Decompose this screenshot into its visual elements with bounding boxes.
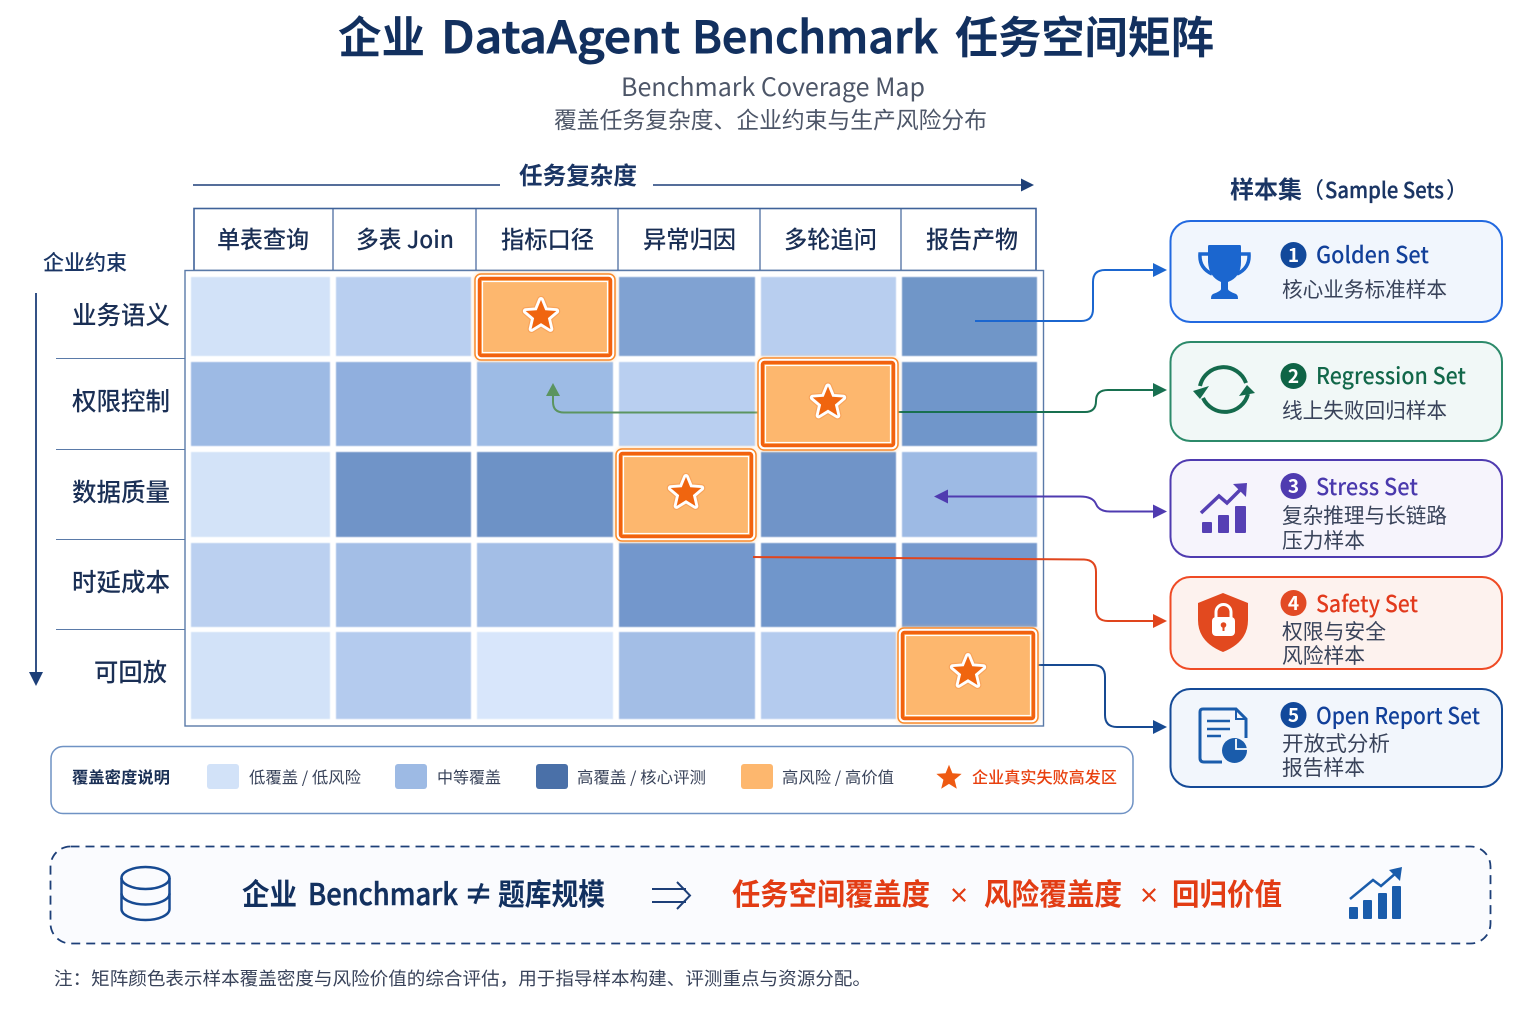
icon: implies arrow <box>652 882 690 909</box>
card title: Golden Set <box>1316 236 1429 270</box>
legend: high coverage: 高覆盖 / 核心评测 <box>577 764 706 788</box>
axis: task complexity: 任务复杂度 <box>519 156 637 191</box>
column headers: 指标口径 <box>501 220 594 255</box>
formula right: × <box>948 880 970 910</box>
heading: sample sets: 样本集 <box>1230 170 1302 205</box>
row 1 cells <box>191 277 1037 356</box>
legend: low coverage <box>207 764 361 789</box>
card description: 开放式分析 <box>1282 728 1390 758</box>
title: 企业 <box>338 2 425 66</box>
legend title: 覆盖密度说明 <box>72 764 170 788</box>
icon: growth chart <box>1349 867 1402 919</box>
arrow: regression feedback <box>546 383 758 412</box>
card description: 核心业务标准样本 <box>1282 274 1447 304</box>
column headers: 单表查询 <box>217 220 309 255</box>
badge 4 <box>1280 589 1306 616</box>
arrow: stress set <box>934 490 1167 518</box>
column headers <box>194 208 1036 270</box>
arrow: matrix to regression set <box>898 383 1167 412</box>
card: regression set <box>1170 342 1502 441</box>
coverage matrix <box>185 270 1044 726</box>
card title: Open Report Set <box>1316 697 1480 731</box>
row labels: 数据质量 <box>72 473 170 509</box>
column headers: 异常归因 <box>643 220 736 255</box>
card description <box>1282 500 1447 555</box>
legend panel <box>51 746 1133 814</box>
heading: sample sets: （ <box>1302 173 1324 205</box>
formula left: 题库规模 <box>498 870 605 914</box>
formula banner <box>50 846 1490 944</box>
formula left: ≠ <box>464 870 494 914</box>
icon: database <box>122 867 170 920</box>
row labels <box>56 296 185 689</box>
legend: high risk <box>741 764 894 789</box>
icon: report document <box>1200 709 1247 763</box>
footnote: 注：矩阵颜色表示样本覆盖密度与风险价值的综合评估，用于指导样本构建、评测重点与资源分配。 <box>54 965 871 991</box>
subtitle: english: Benchmark Coverage Map <box>621 68 925 104</box>
badge 2 <box>1280 362 1306 389</box>
badge 5 <box>1280 701 1306 728</box>
column headers: 多轮追问 <box>784 220 877 255</box>
row axis: enterprise constraints <box>29 247 127 686</box>
badge 1 <box>1280 241 1306 268</box>
badge 4: 4 <box>1288 589 1299 616</box>
icon: shield with lock <box>1198 593 1248 652</box>
title: DataAgent <box>441 2 680 66</box>
card: open report set <box>1170 689 1502 787</box>
formula right: 风险覆盖度 <box>984 870 1122 914</box>
card description: 压力样本 <box>1282 525 1365 555</box>
subtitle: chinese: 覆盖任务复杂度、企业约束与生产风险分布 <box>554 101 987 135</box>
legend: failure hot zone star: 企业真实失败高发区 <box>972 764 1117 788</box>
card: golden set <box>1170 221 1502 322</box>
arrow: matrix to golden set <box>975 263 1167 321</box>
formula left: Benchmark <box>308 870 458 914</box>
card title: Safety Set <box>1316 585 1418 619</box>
row 4 cells <box>191 543 1037 627</box>
row axis: enterprise constraints: 企业约束 <box>43 247 127 277</box>
legend: low coverage: 低覆盖 / 低风险 <box>249 764 361 788</box>
title: 任务空间矩阵 <box>955 2 1214 66</box>
highlight cell: metric caliber x business semantics <box>475 274 615 360</box>
card description <box>1282 728 1390 782</box>
row labels: 时延成本 <box>72 563 170 599</box>
card description <box>1282 616 1386 670</box>
arrow: open report set <box>1038 665 1167 734</box>
badge 3 <box>1280 472 1306 499</box>
card description: 复杂推理与长链路 <box>1282 500 1447 530</box>
row 5 cells <box>191 632 896 719</box>
title <box>338 2 1214 66</box>
row 2 cells <box>191 362 1037 446</box>
row 3 cells <box>191 452 1037 537</box>
card title: Stress Set <box>1316 468 1418 502</box>
formula left: 企业 <box>242 870 297 914</box>
legend: high risk: 高风险 / 高价值 <box>782 764 894 788</box>
badge 5: 5 <box>1288 701 1299 728</box>
formula right: 任务空间覆盖度 <box>732 870 930 914</box>
icon: trophy <box>1200 245 1249 299</box>
heading: sample sets: Sample Sets <box>1325 173 1444 205</box>
card description: 风险样本 <box>1282 640 1365 670</box>
formula right: 回归价值 <box>1172 870 1282 914</box>
icon: rising chart <box>1201 483 1247 533</box>
badge 3: 3 <box>1288 472 1299 499</box>
highlight cell: report output x replayability <box>898 628 1038 723</box>
column headers: 报告产物 <box>926 220 1018 255</box>
row labels: 可回放 <box>94 653 167 689</box>
card: safety set <box>1170 577 1502 670</box>
card description: 线上失败回归样本 <box>1282 395 1447 425</box>
row labels: 业务语义 <box>72 296 170 332</box>
heading: sample sets: ） <box>1446 173 1468 205</box>
row labels: 权限控制 <box>72 382 170 418</box>
heading: sample sets <box>1230 170 1468 205</box>
icon: sync arrows <box>1193 367 1255 412</box>
card description: 报告样本 <box>1282 752 1365 782</box>
formula right: × <box>1138 880 1160 910</box>
card title: Regression Set <box>1316 357 1466 391</box>
arrow: safety set <box>753 557 1167 628</box>
legend: medium coverage <box>395 764 501 789</box>
axis: task complexity <box>193 156 1034 192</box>
legend: medium coverage: 中等覆盖 <box>437 764 501 788</box>
highlight cell: root cause x data quality <box>616 449 756 541</box>
formula left <box>242 870 605 914</box>
card: stress set <box>1170 460 1502 557</box>
badge 1: 1 <box>1288 241 1299 268</box>
badge 2: 2 <box>1288 362 1299 389</box>
column headers: 多表 Join <box>356 220 454 255</box>
card description: 权限与安全 <box>1282 616 1386 646</box>
title: Benchmark <box>692 2 938 66</box>
formula right <box>732 870 1282 914</box>
highlight cell: multi-turn x permissions <box>758 358 898 450</box>
